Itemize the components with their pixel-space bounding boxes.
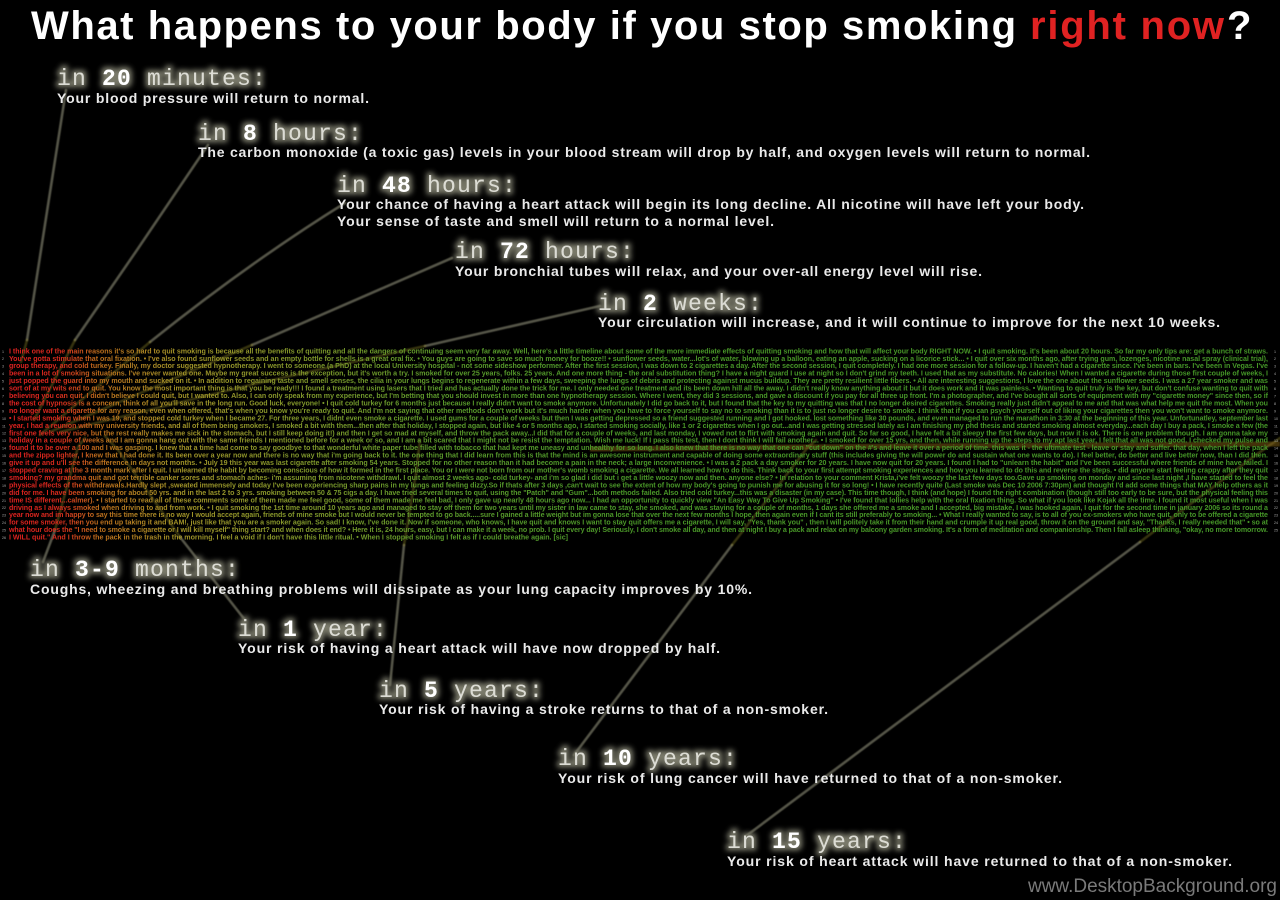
left line numbers: 20 — [2, 491, 6, 495]
right line numbers: 1 — [1274, 350, 1276, 354]
description: Your risk of lung cancer will have returned to that of a non-smoker. — [558, 770, 1062, 786]
milestone: in 5 years — [379, 678, 828, 717]
milestone: in 10 years — [558, 746, 1062, 786]
left line numbers: 7 — [2, 394, 4, 398]
watermark: www.DesktopBackground.org — [1027, 876, 1277, 897]
body text lines — [8, 347, 1269, 542]
label: in 3-9 months: — [30, 557, 240, 583]
connector: in 1 year — [105, 436, 245, 620]
label: in 48 hours: — [337, 173, 517, 199]
left line numbers: 23 — [2, 514, 6, 518]
right line numbers: 25 — [1274, 529, 1278, 533]
connector: in 2 weeks — [60, 306, 600, 432]
left line numbers — [2, 350, 6, 540]
body text lines: You've gotta stimulate that oral fixation. • I've also found sunflower seeds and an empty bottle for shells is a great oral fix. • You guys are going to save so much money for booze!! • sunflower seeds, water...lot's of water, blowing up a balloon, eating an apple, sucking on a licorice stick... • I quit over six months ago, after trying gum, lozenges, nicotine nasal spray (clinical trial), — [9, 355, 1268, 363]
left line numbers: 13 — [2, 439, 6, 443]
connector: in 10 years — [574, 440, 816, 755]
description line 1: Your chance of having a heart attack will begin its long decline. All nicotine will have left your body. — [337, 196, 1084, 212]
label: in 1 year: — [238, 617, 388, 643]
left line numbers: 22 — [2, 506, 6, 510]
left line numbers: 21 — [2, 499, 6, 503]
body text lines: the cost of hypnosis is a concern, think of all you'll save in the long run. Good luck, everyone! • I quit cold turkey for 6 months just because I really didn't want to smoke anymore. Unfortunately I did go back to it, but I found that the key to my quitting was that I no longer desired cigarettes. Smoking really just didn't appeal to me and that was what help me quit the most. When you — [9, 399, 1268, 407]
body text lines: driving as I always smoked when driving to and from work. • I quit smoking the 1st time around 10 years ago and managed to stay off them for two years until my sister in law came to stay, she smoked, and was staying for a couple of months, 1 days she offered me a smoke and I accepted, big mistake, I was hooked again, I quit for the second time in january 2006 so its round a — [9, 504, 1268, 512]
right line numbers — [1274, 350, 1278, 533]
body text lines: believing you can quit. I didn't believe I could quit, but I wanted to. Also, I can only speak from my experience, but I'm betting that you should invest in more than one hypnotherapy session. Where I went, they did 3 sessions, and gave a discount if you pay for all three up front. I'm a photographer, and I've bought all sorts of equipment with my "cigarette money" since then, so if — [9, 392, 1269, 400]
description: Your bronchial tubes will relax, and your over-all energy level will rise. — [455, 263, 982, 279]
label: in 72 hours: — [455, 239, 635, 265]
left line numbers: 10 — [2, 417, 6, 421]
left line numbers: 9 — [2, 409, 4, 413]
milestone: in 20 minutes — [57, 66, 369, 106]
right line numbers: 22 — [1274, 506, 1278, 510]
left line numbers: 19 — [2, 484, 6, 488]
body text lines: year now and im happy to say this time there is no way I would accept again, friends of mine smoke but I would never be tempted to go back.....sure I gained a little weight but im gonna lose that over the next few months I hope, then again even if I cant its still preferably to smoking... • What I really wanted to say, is to all of you ex-smokers who have quit, only to be offered a cigarette — [9, 511, 1268, 519]
left line numbers: 5 — [2, 380, 4, 384]
body text lines: holiday in a couple of weeks and I am gonna hang out with the same friends I mentioned before for a week or so, and I am a bit scared that I might not be resist the temptation. Wish me luck! If I pass this test, then I dont think I will fail another... • I smoked for over 15 yrs, and then, while running up the steps to my apt last year, I felt that all was not good. I checked my pulse and — [9, 437, 1268, 445]
body text lines: sort of at my wits end to quit. You know the most important thing is that you be ready!!! I found a treatment using lasers that I tried and has actually done the trick for me. I only needed one treatment and its been down hill all the away. I didn't really know anything about it but it does work and it was painless. • Wanting to quit truly is the key, but don't confuse wanting to quit with — [9, 385, 1268, 393]
label: in 20 minutes: — [57, 66, 267, 92]
body text lines: been in a lot of smoking situations. I've never wanted one. Maybe my great success is the exception, but it's worth a try. I smoked for over 25 years, folks. 25 years. And one more thing - the oral substitution thing? I have a night guard I use at night so I don't grind my teeth. I used that as my substitute. No calories! When I wanted a cigarette during those first couple of weeks, I — [9, 370, 1268, 378]
body text lines: group therapy, and cold turkey. Finally, my doctor suggested hypnotherapy. I went to someone (a PhD) at the local University hospital - not some sideshow performer. After the first session, I was down to 2 cigarettes a day. After the second session, I quit completely. I had one more session for a follow-up. I haven't had a cigarette since. I've been in bars. I've been in Vegas. I've — [9, 362, 1268, 370]
right line numbers: 20 — [1274, 491, 1278, 495]
right line numbers: 21 — [1274, 499, 1278, 503]
right line numbers: 19 — [1274, 484, 1278, 488]
band across the text block — [590, 444, 1280, 449]
label: in 8 hours: — [198, 121, 363, 147]
right line numbers: 17 — [1274, 469, 1278, 473]
right line numbers: 3 — [1274, 365, 1276, 369]
left line numbers: 12 — [2, 432, 6, 436]
right line numbers: 16 — [1274, 462, 1278, 466]
label: in 15 years: — [727, 829, 907, 855]
right line numbers: 13 — [1274, 439, 1278, 443]
description: Your risk of having a stroke returns to that of a non-smoker. — [379, 701, 828, 717]
description line 2: Your sense of taste and smell will return to a normal level. — [337, 213, 774, 229]
right line numbers: 9 — [1274, 409, 1276, 413]
description: Your circulation will increase, and it will continue to improve for the next 10 weeks. — [598, 314, 1220, 330]
body text lines: I think one of the main reasons it's so hard to quit smoking is because all the benefits of quitting and all the dangers of continuing seem very far away. Well, here's a little timeline about some of the more immediate effects of quitting smoking and how that will affect your body RIGHT NOW. • I quit smoking. it's been about 20 hours. So far my only tips are: get a bunch of straws. — [9, 347, 1268, 355]
milestone: in 3-9 months — [30, 557, 752, 597]
title: ? — [1227, 4, 1251, 48]
body text lines: stopped craving at the 3 month mark after I quit. I unlearned the habit by becoming conscious of how it formed in the first place. You or I were not born from our mother's womb smoking a cigarette. We all learned how to do this. Think back to your first attempt smoking experiences and how you learned to do this and reverse the steps. • did anyone start feeling crappy after they quit — [9, 466, 1269, 474]
left line numbers: 18 — [2, 476, 6, 480]
body text lines: first one feels very nice, but the rest really makes me sick in the stomach, but I still keep doing it!) and then I get so mad at myself, and throw the pack away...I did that for a couple of weeks, and last monday, I vowed not to flirt with smoking again and quit. So far so good, I have felt a bit sleepy the first few days, but now it is ok. There is one problem though. I am gonna take my — [9, 429, 1268, 437]
milestone: in 48 hours — [337, 173, 1084, 229]
connector: in 5 years — [390, 440, 420, 685]
description: Your risk of heart attack will have returned to that of a non-smoker. — [727, 853, 1232, 869]
right line numbers: 18 — [1274, 476, 1278, 480]
right line numbers: 5 — [1274, 380, 1276, 384]
title: What happens to your body if you stop smoking — [31, 4, 1016, 48]
left line numbers: 6 — [2, 387, 4, 391]
description: Coughs, wheezing and breathing problems will dissipate as your lung capacity improves by 10%. — [30, 581, 752, 597]
body text lines: time IS different...calmer). • I started to read all of these comments some of them made me feel good, some of them made me feel bad, I only gave up nearly 48 hours ago now... I had an opportunity to quickly view "An Easy Way To Give Up Smoking" • I've found that lollies help with the oral fixation thing. So what if you look like Kojak all the time. I found it most useful when I was — [9, 496, 1268, 504]
connector: in 48 hours — [40, 203, 345, 435]
connector: in 72 hours — [50, 258, 452, 432]
right line numbers: 6 — [1274, 387, 1276, 391]
right line numbers: 10 — [1274, 417, 1278, 421]
body text lines: no longer want a cigarette for any reason, even when offered, that's when you know you're ready to quit. And I'm not saying that other methods don't work but it's much harder when you have to force yourself to say no to smoking than it is to just no longer desire to smoke. I think that if you can psych yourself out of liking your cigarettes then you won't want to smoke anymore. — [9, 407, 1268, 415]
label: in 2 weeks: — [598, 291, 763, 317]
body text lines: did for me. I have been smoking for about 50 yrs. and in the last 2 to 3 yrs. smoking between 50 & 75 cigs a day. I have tried several times to quit, using the "Patch" and "Gum"...both methods failed. Also tried cold turkey...this was a disaster (in my case). This time though, I think (and hope) I found the right combination (though still too early to be sure, but the physical feeling this — [9, 489, 1268, 497]
connector: in 20 minutes — [21, 90, 66, 362]
description: The carbon monoxide (a toxic gas) levels in your blood stream will drop by half, and oxygen levels will return to normal. — [198, 144, 1090, 160]
body text lines: and the zippo lighter, I knew that I had done it. Its been over a year now and there is no way that i'm going back to it. the one thing that I did learn from this is that the mind is an awesome instrument and capable of doing some extraordinary stuff (this includes giving the will power do and sustain what one wants to do). I feel better, do better and live better now, than I did then. — [9, 452, 1268, 460]
label: in 5 years: — [379, 678, 544, 704]
title: right now — [1030, 4, 1225, 48]
milestone: in 72 hours — [455, 239, 982, 279]
left line numbers: 15 — [2, 454, 6, 458]
left line numbers: 24 — [2, 521, 6, 525]
description: Your risk of having a heart attack will have now dropped by half. — [238, 640, 720, 656]
right line numbers: 15 — [1274, 454, 1278, 458]
body text lines: for some smoker, then you end up taking it and BAM!, just like that you are a smoker again. So sad! I know, I've done it. Now if someone, who knows, I have quit and knows I want to stay quit offers me a cigarette, I will say, "Yes, thank you" , then I will politely take it from their hand and crumple it up real good, throw it on the ground and say, "Thanks, I really needed that" • so at — [9, 519, 1269, 527]
milestone: in 15 years — [727, 829, 1232, 869]
label: in 10 years: — [558, 746, 738, 772]
left line numbers: 3 — [2, 365, 4, 369]
right line numbers: 14 — [1274, 447, 1278, 451]
left line numbers: 2 — [2, 357, 4, 361]
left line numbers: 26 — [2, 536, 6, 540]
left line numbers: 11 — [2, 424, 6, 428]
description: Your blood pressure will return to normal. — [57, 90, 369, 106]
left line numbers: 1 — [2, 350, 4, 354]
body text lines: just popped the guard into my mouth and sucked on it. • In addition to regaining taste and smell senses, the cilia in your lungs begins to regenerate within a few days, sweeping the lungs of debris and protecting against mucus buildup. They are pretty resilient little fibers. • All are interesting suggestions, I love the one about the sunflower seeds. I was a 27 year smoker and was — [8, 377, 1268, 385]
panel: wall of testimonial text — [2, 347, 1278, 542]
connector: in 8 hours — [34, 145, 208, 420]
right line numbers: 8 — [1274, 402, 1276, 406]
body text lines: smoking? my grandma quit and got terrible canker sores and stomach aches- i'm assuming from nicotene withdrawl. I quit almost 2 weeks ago- cold turkey- and i'm so glad i did but i get a little woozy now and then. anyone else? • In relation to your comment Krista,i've felt woozy the last few days too.Gave up smoking on monday and since last night ,I have started to feel the — [9, 474, 1268, 482]
body text lines: found it to be over a 100 and I was gasping. I knew that a time had come to say goodbye to that wonderful white paper tube filled with tobacco that had kept me uneasy and unhealthy for so long. I also knew that there is no way that one can "cut down" on the #'s and leave it over a period of time. this was it - the ultimate test - leave or stay and suffer. that day, when I left the pack — [9, 444, 1268, 452]
body text lines: year, I had a reunion with my university friends, and all of them being smokers, I smoked a bit with them...then after that holiday, I stopped again, but like 4 or 5 months ago, I started smoking socially, like 1 or 2 cigarettes when I go out...and I was getting stressed lately as I am finishing my phd thesis and started smoking almost everyday...each day I buy a pack, I smoke a few (the — [9, 422, 1268, 430]
milestone: in 2 weeks — [598, 291, 1220, 330]
left line numbers: 4 — [2, 372, 4, 376]
body text lines: physical effects of the withdrawals.Hardly slept ,sweated immensely and today I've been experiencing sharp pains in my lungs and feeling dizzy.So if thats after 3 days ,can't wait to see the extent of how my body's going to punish me for abusing it for so long! • I have recently quite (Last smoke was Dec 10 2006 7:30pm) and thought I'd add some things that MAY help others as it — [9, 481, 1269, 489]
right line numbers: 24 — [1274, 521, 1278, 525]
right line numbers: 11 — [1274, 424, 1278, 428]
milestone: in 1 year — [238, 617, 720, 656]
left line numbers: 14 — [2, 447, 6, 451]
milestone: in 8 hours — [198, 121, 1090, 160]
body text lines: • I started smoking when I was 19, and stopped cold turkey when I became 27. For three years, I didnt even smoke a cigarette. I used gums for a couple of weeks but then I was getting depressed so a friend suggested running and I got hooked. lost something like 30 pounds, and even managed to run the marathon in 3:30 at the beginning of this year. Unfortunatley, september last — [9, 414, 1269, 422]
right line numbers: 2 — [1274, 357, 1276, 361]
right line numbers: 23 — [1274, 514, 1278, 518]
left line numbers: 16 — [2, 462, 6, 466]
left line numbers: 25 — [2, 529, 6, 533]
connector: in 3-9 months — [43, 438, 85, 562]
body text lines: give it up and u'll see the difference in days not months. • July 19 this year was last cigarette after smoking 54 years. Stopped for no other reason than it had become a pain in the neck; a large inconvenience. • I was a 2 pack a day smoker for 20 years. I have now quit for 20 years. I found I had to "unlearn the habit" and I've been successful where friends of mine have failed. I — [9, 459, 1268, 467]
body text lines: I WILL quit." And I throw the pack in the trash in the morning. I feel a void if I don't have this little ritual. • When I stopped smoking I felt as if I could breathe again. [sic] — [9, 534, 568, 542]
body text lines: what hour does the "I need to smoke a cigarette or I will kill myself" thing start? and when does it end? • Here it is, 24 hours, easy, but I can make it a week, no prob. I quit every day! Seriously, I don't smoke all day, and then at night I buy a pack and relax on my balcony garden smoking. It's a form of meditation and companionship. Then I fall asleep thinking, "okay, no more tomorrow. — [8, 526, 1268, 534]
left line numbers: 17 — [2, 469, 6, 473]
right line numbers: 7 — [1274, 394, 1276, 398]
connector: in 15 years — [746, 438, 1280, 836]
right line numbers: 4 — [1274, 372, 1276, 376]
right line numbers: 12 — [1274, 432, 1278, 436]
left line numbers: 8 — [2, 402, 4, 406]
